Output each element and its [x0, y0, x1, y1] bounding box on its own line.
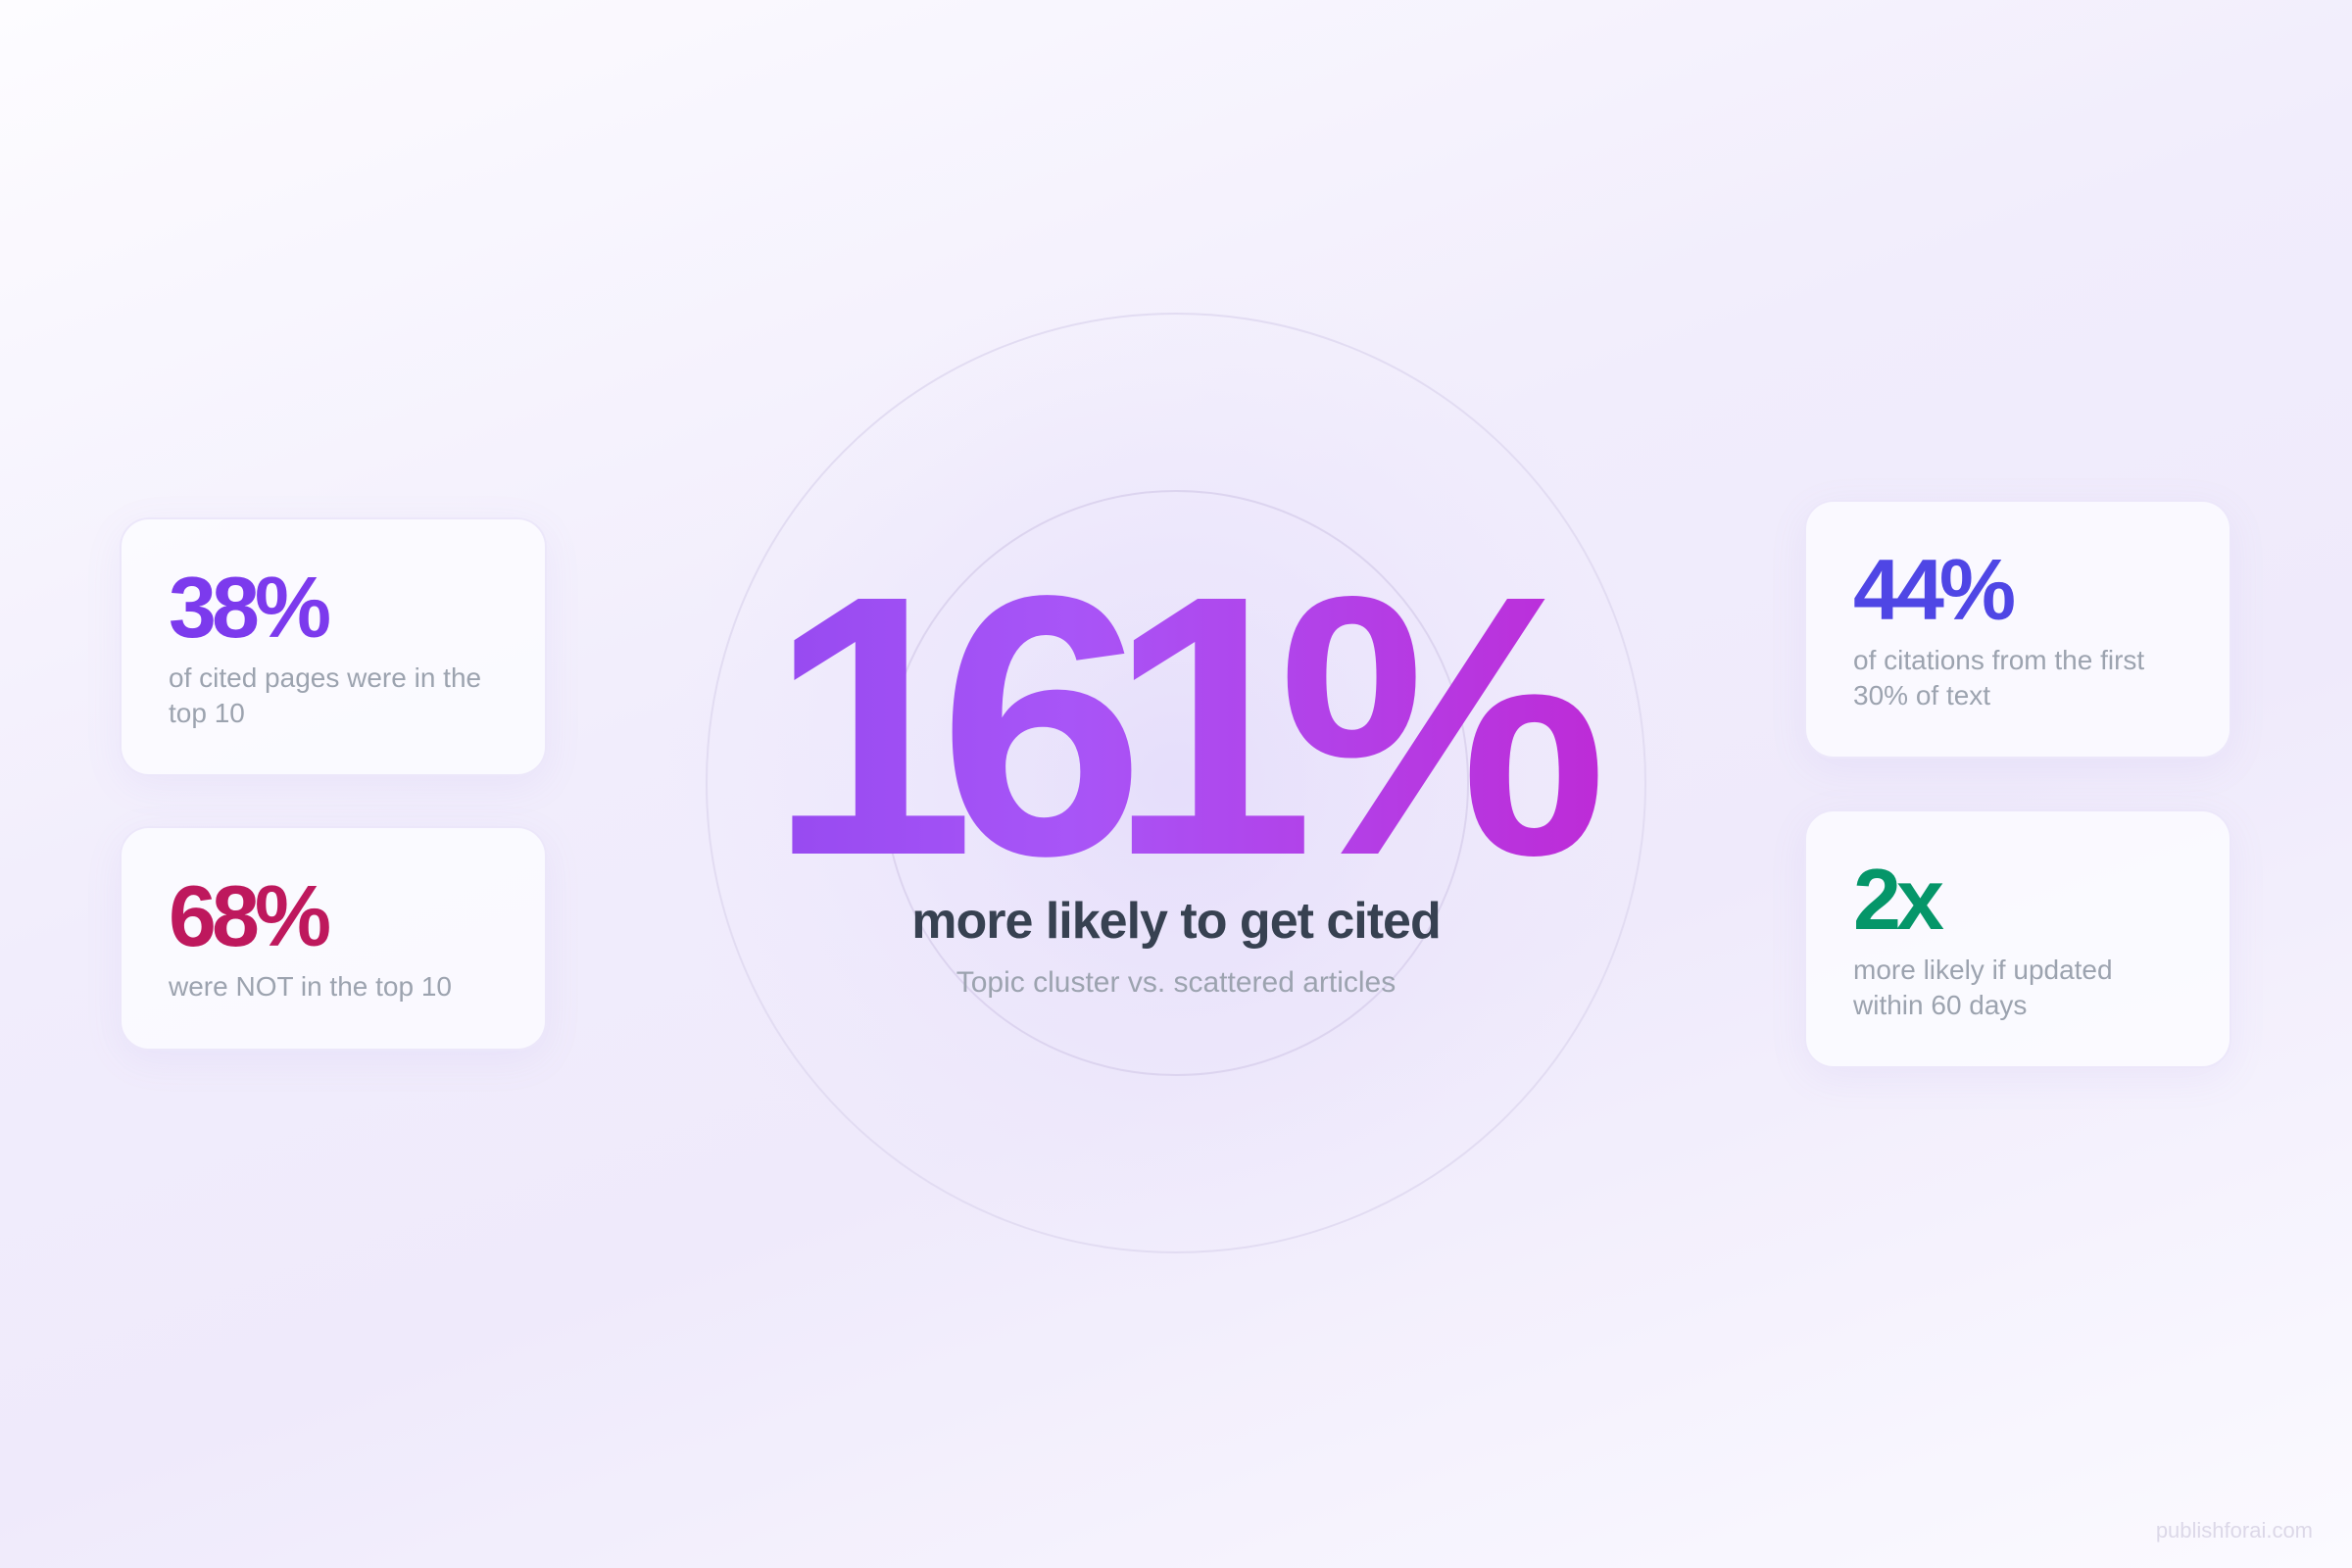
- headline: more likely to get cited: [911, 893, 1441, 950]
- card: 38%: of cited pages were in the top 10: [169, 662, 481, 728]
- card: 68%: were NOT in the top 10: [169, 971, 452, 1002]
- watermark: publishforai.com: [2156, 1518, 2313, 1543]
- card: 44%: 44%: [1853, 541, 2011, 638]
- card: 68%: [120, 826, 547, 1051]
- subtitle: Topic cluster vs. scattered articles: [956, 966, 1396, 999]
- card: 44%: [1804, 500, 2231, 759]
- card: 38%: [120, 517, 547, 776]
- card: 68%: 68%: [169, 867, 326, 964]
- card: 2x: more likely if updated within 60 days: [1853, 955, 2113, 1020]
- big number 161%: 161%: [769, 519, 1571, 933]
- card: 2x: 2x: [1853, 851, 1939, 948]
- card: 44%: of citations from the first 30% of text: [1853, 645, 2144, 710]
- card: 38%: 38%: [169, 559, 326, 656]
- card: 2x: [1804, 809, 2231, 1068]
